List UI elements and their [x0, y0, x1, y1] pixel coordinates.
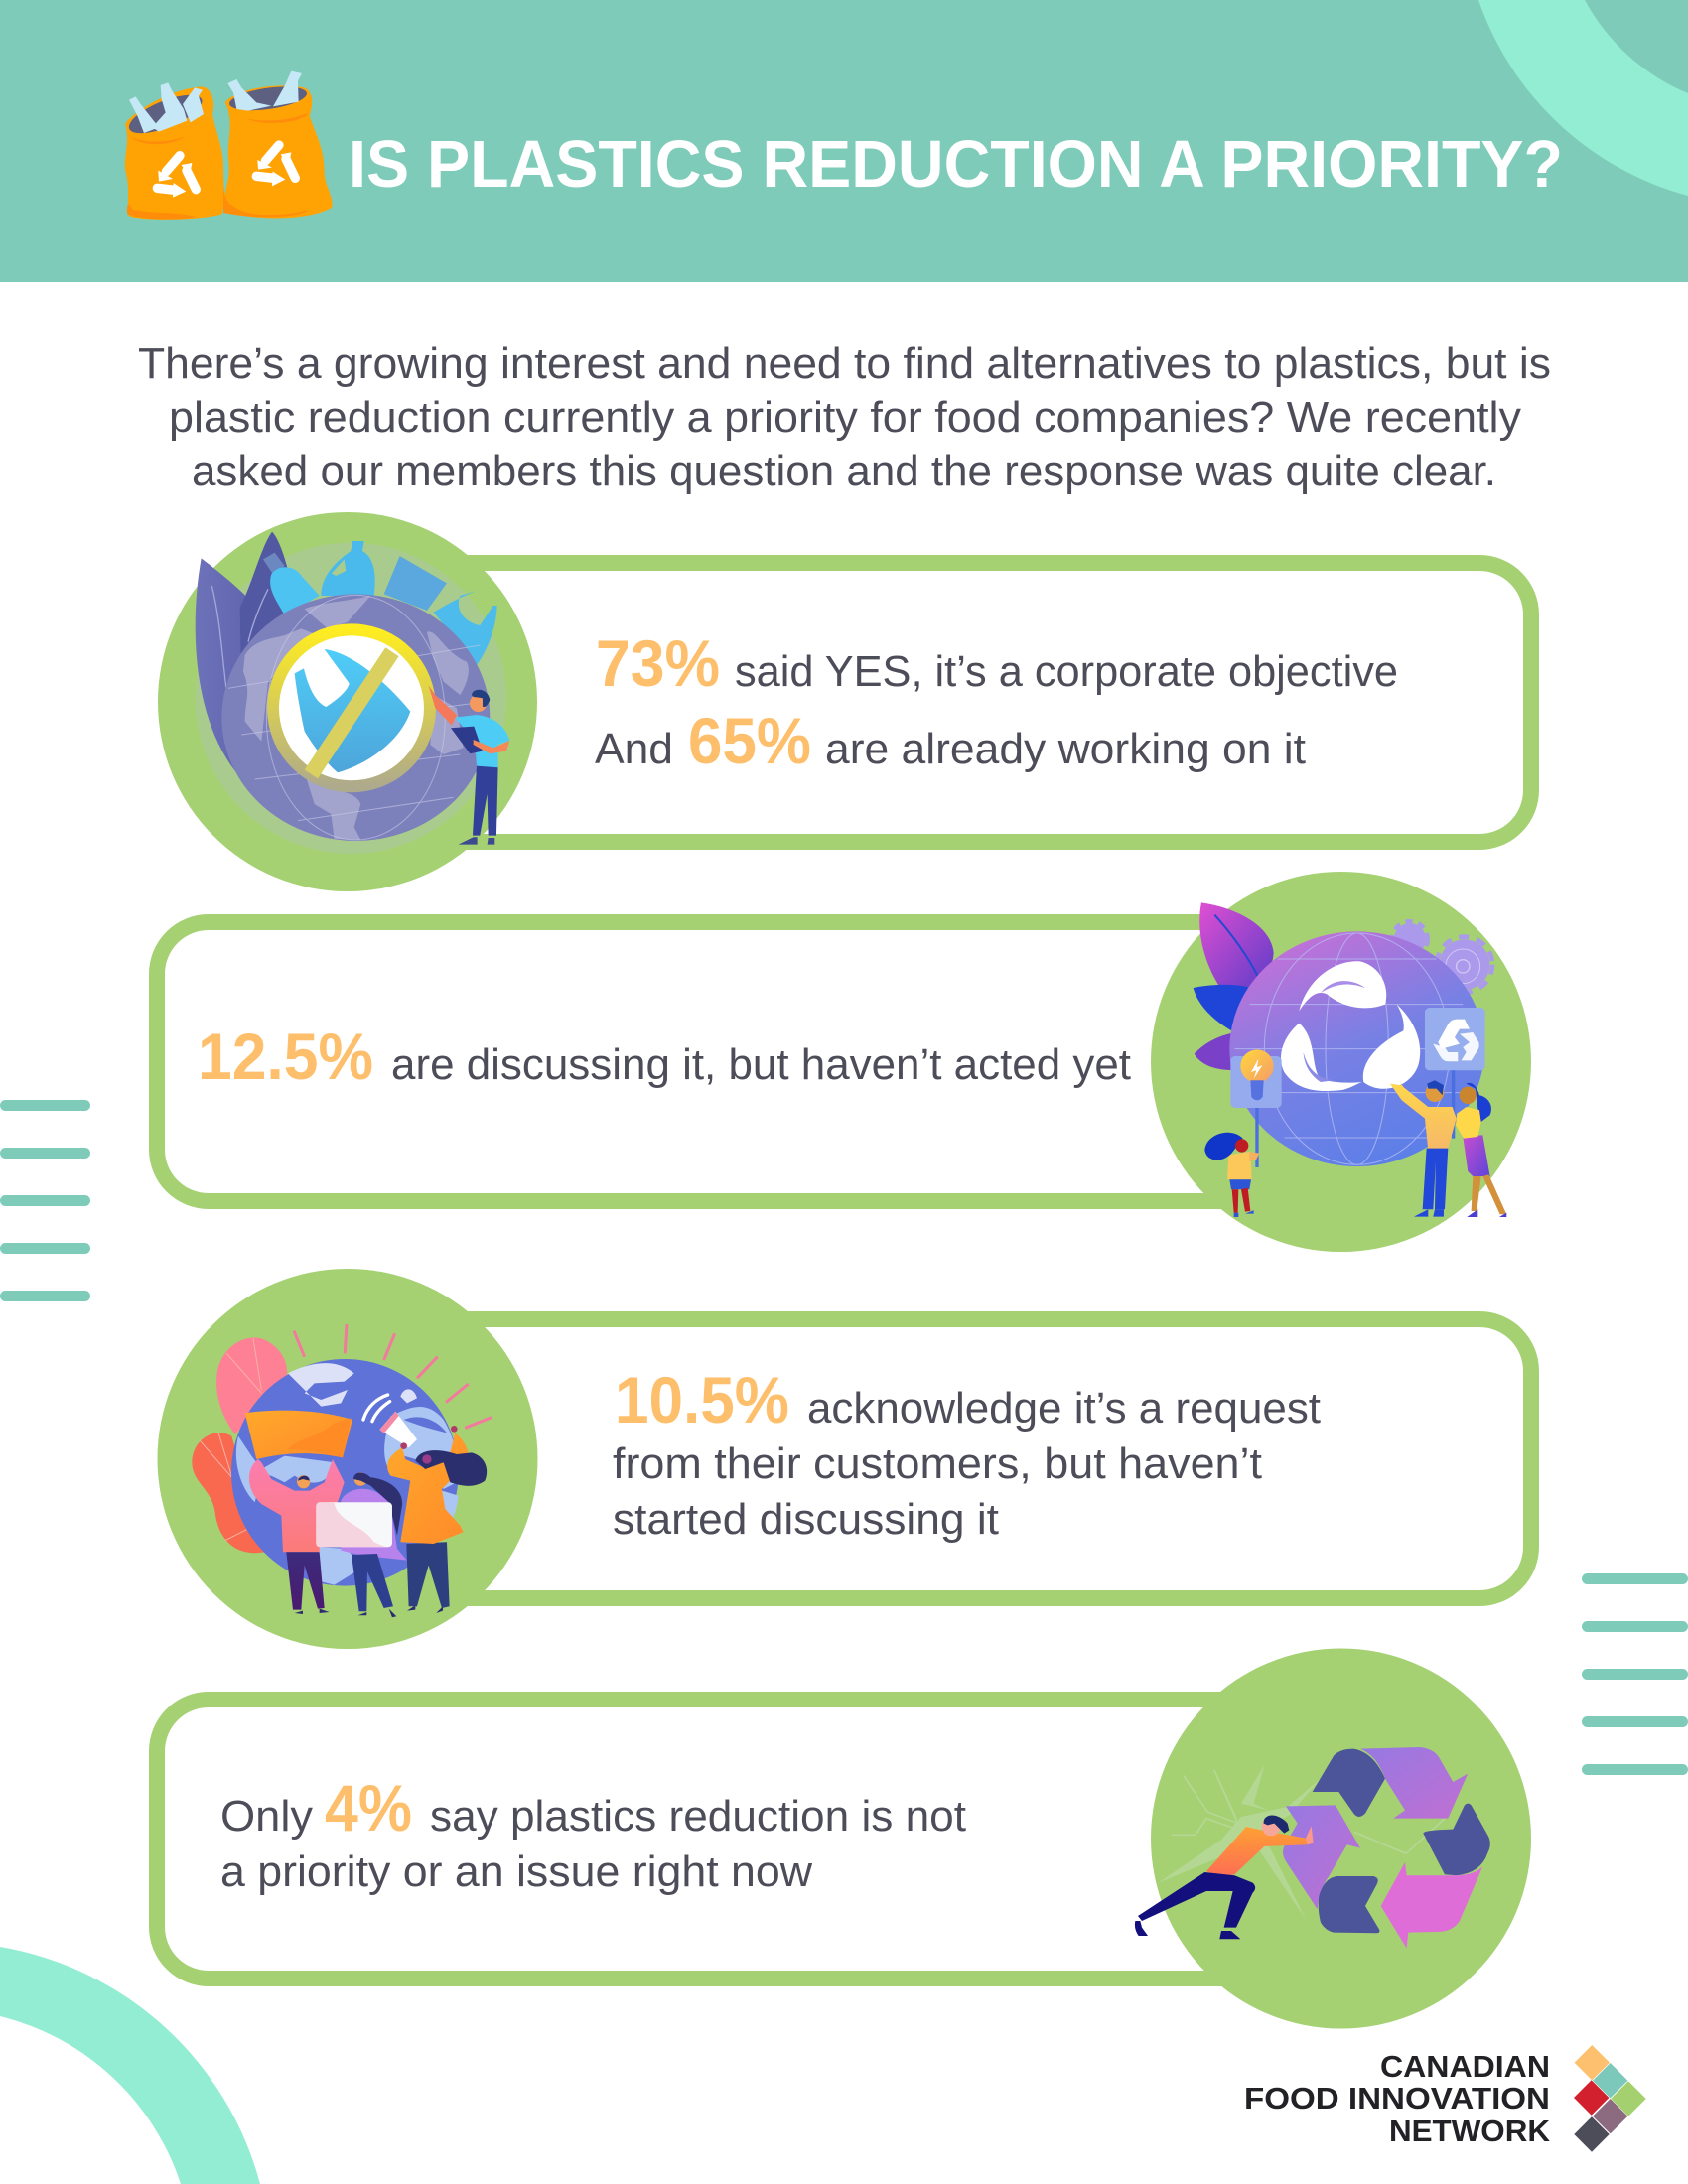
- panel outline 2: [157, 922, 1291, 1201]
- intro text: asked our members this question and the response was quite clear.: [192, 447, 1496, 495]
- statistic text 4 percent: say plastics reduction is not: [430, 1792, 966, 1841]
- panel outline 1: [397, 563, 1531, 842]
- statistic text 12.5 percent: [198, 1020, 1131, 1093]
- statistic text 10.5 percent: [613, 1363, 1321, 1544]
- intro text: [138, 340, 1551, 495]
- statistic text 12.5 percent: 12.5%: [198, 1020, 373, 1093]
- statistic text 10.5 percent: 10.5%: [615, 1363, 789, 1436]
- statistic text 73 and 65 percent: are already working on it: [825, 725, 1306, 773]
- statistic text 73 and 65 percent: 73%: [596, 626, 720, 700]
- panel: 73 percent yes: [158, 512, 1531, 891]
- logo mark diamonds: [1574, 2045, 1646, 2152]
- panel: 4 percent not a priority: [157, 1648, 1531, 2029]
- panel: 12.5 percent discussing: [157, 872, 1531, 1252]
- panel outline 3: [397, 1319, 1531, 1598]
- statistic text 73 and 65 percent: [595, 626, 1398, 777]
- logo wordmark: NETWORK: [1389, 2114, 1551, 2148]
- logo: Canadian Food Innovation Network: [1244, 2045, 1646, 2152]
- header band: [0, 0, 1688, 282]
- statistic text 4 percent: a priority or an issue right now: [220, 1847, 812, 1896]
- logo wordmark: CANADIAN: [1380, 2049, 1550, 2084]
- circle background 3: [157, 1269, 538, 1649]
- statistic text 4 percent: Only: [220, 1792, 313, 1841]
- intro text: plastic reduction currently a priority for food companies? We recently: [169, 393, 1521, 442]
- statistic text 10.5 percent: started discussing it: [613, 1495, 999, 1544]
- illustration: globe with plastic ban: [196, 532, 509, 854]
- illustration: man pushing recycling symbol: [1135, 1747, 1490, 1949]
- statistic text 10.5 percent: acknowledge it’s a request: [807, 1384, 1321, 1433]
- icon: recycling bags with bottles: [124, 71, 333, 220]
- statistic text 4 percent: [220, 1771, 966, 1896]
- circle background 2: [1151, 872, 1531, 1252]
- title: IS PLASTICS REDUCTION A PRIORITY?: [349, 127, 1563, 202]
- circle background 4: [1151, 1648, 1531, 2029]
- illustration: protesters and globe: [192, 1324, 492, 1617]
- decorative arc bottom left: [0, 1947, 260, 2184]
- panel outline 4: [157, 1700, 1291, 1979]
- statistic text 73 and 65 percent: 65%: [688, 704, 811, 777]
- statistic text 4 percent: 4%: [325, 1771, 412, 1844]
- statistic text 73 and 65 percent: said YES, it’s a corporate objective: [735, 647, 1398, 696]
- intro text: There’s a growing interest and need to find alternatives to plastics, but is: [138, 340, 1551, 388]
- illustration: recycling leaves globe with people: [1194, 902, 1506, 1217]
- statistic text 12.5 percent: are discussing it, but haven’t acted yet: [391, 1040, 1131, 1089]
- statistic text 10.5 percent: from their customers, but haven’t: [613, 1439, 1262, 1488]
- circle background 1: [158, 512, 537, 891]
- logo wordmark: [1244, 2049, 1551, 2148]
- decorative stripes right: [1582, 1573, 1688, 1775]
- panel: 10.5 percent customers: [157, 1269, 1531, 1649]
- statistic text 73 and 65 percent: And: [595, 725, 673, 773]
- decorative stripes left: [0, 1100, 90, 1301]
- logo wordmark: FOOD INNOVATION: [1244, 2081, 1550, 2116]
